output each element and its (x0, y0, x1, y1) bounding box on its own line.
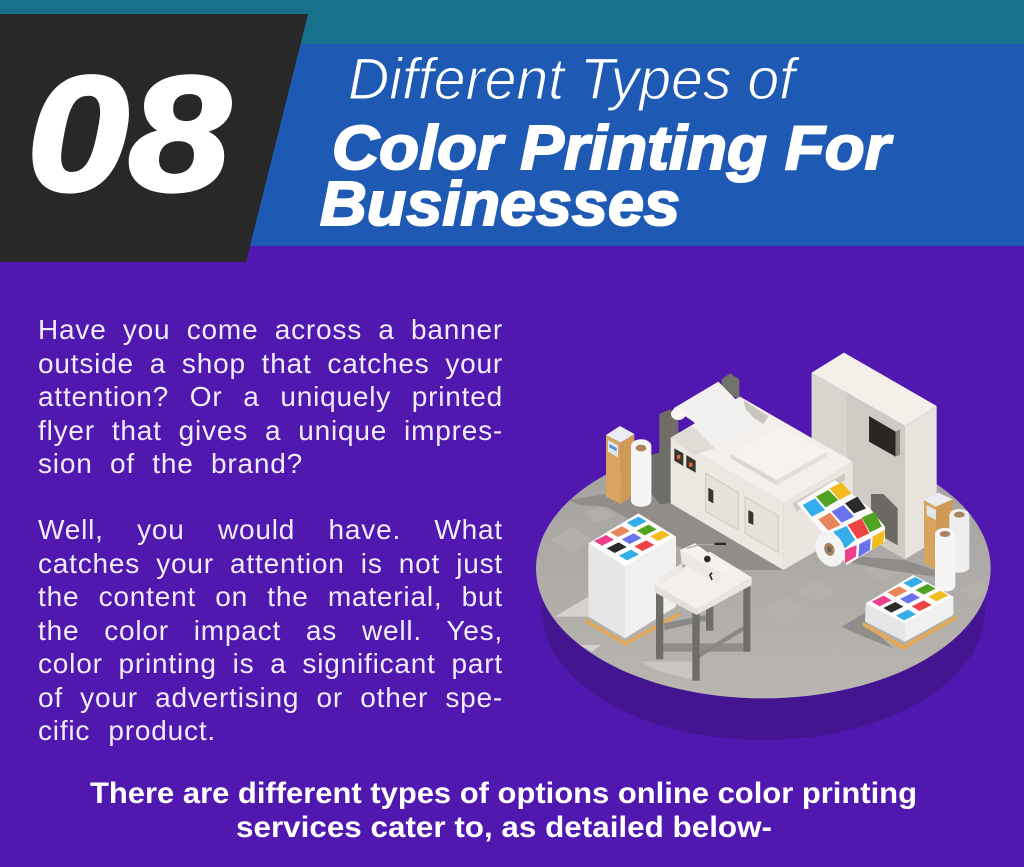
intro paragraph two: the color impact as well. Yes, (38, 614, 503, 646)
tall cabinet (812, 353, 937, 559)
intro paragraph one: sion of the brand? (38, 448, 303, 479)
intro paragraph two (38, 514, 503, 746)
title: Different Types of (348, 47, 801, 112)
number badge (0, 14, 308, 262)
cutting table (655, 543, 752, 681)
intro paragraph two: catches your attention is not just (38, 548, 503, 578)
title: Color Printing For (332, 114, 893, 183)
closing statement: There are different types of options online color printing (90, 777, 917, 810)
header banner (0, 0, 1024, 262)
closing statement: services cater to, as detailed below- (236, 811, 772, 844)
printing machine (671, 382, 853, 570)
intro paragraph one (38, 314, 503, 479)
printed colour sheet and roll (797, 480, 885, 572)
intro paragraph one: Have you come across a banner (38, 314, 503, 345)
left tan box and roll (606, 426, 651, 507)
intro paragraph one: attention? Or a uniquely printed (38, 381, 503, 412)
control buttons (674, 448, 696, 473)
floor shadows (555, 487, 935, 680)
title: Businesses (320, 170, 680, 239)
number badge: 08 (27, 42, 230, 225)
intro paragraph one: flyer that gives a unique impres- (38, 414, 503, 446)
paper roll stand (652, 373, 739, 504)
intro paragraph two: the content on the material, but (38, 581, 503, 612)
intro paragraph two: of your advertising or other spe- (38, 682, 503, 712)
intro paragraph one: outside a shop that catches your (38, 348, 503, 378)
machine doors (706, 473, 778, 552)
low paper stack on pallet (863, 575, 957, 650)
platform (536, 438, 991, 740)
intro paragraph two: color printing is a significant part (38, 648, 503, 679)
intro paragraph two: cific product. (38, 715, 216, 746)
right tan box and rolls (924, 493, 969, 591)
tall paper stack on pallet (585, 513, 680, 646)
title (320, 47, 893, 239)
closing statement (90, 777, 917, 844)
intro paragraph two: Well, you would have. What (38, 514, 503, 545)
